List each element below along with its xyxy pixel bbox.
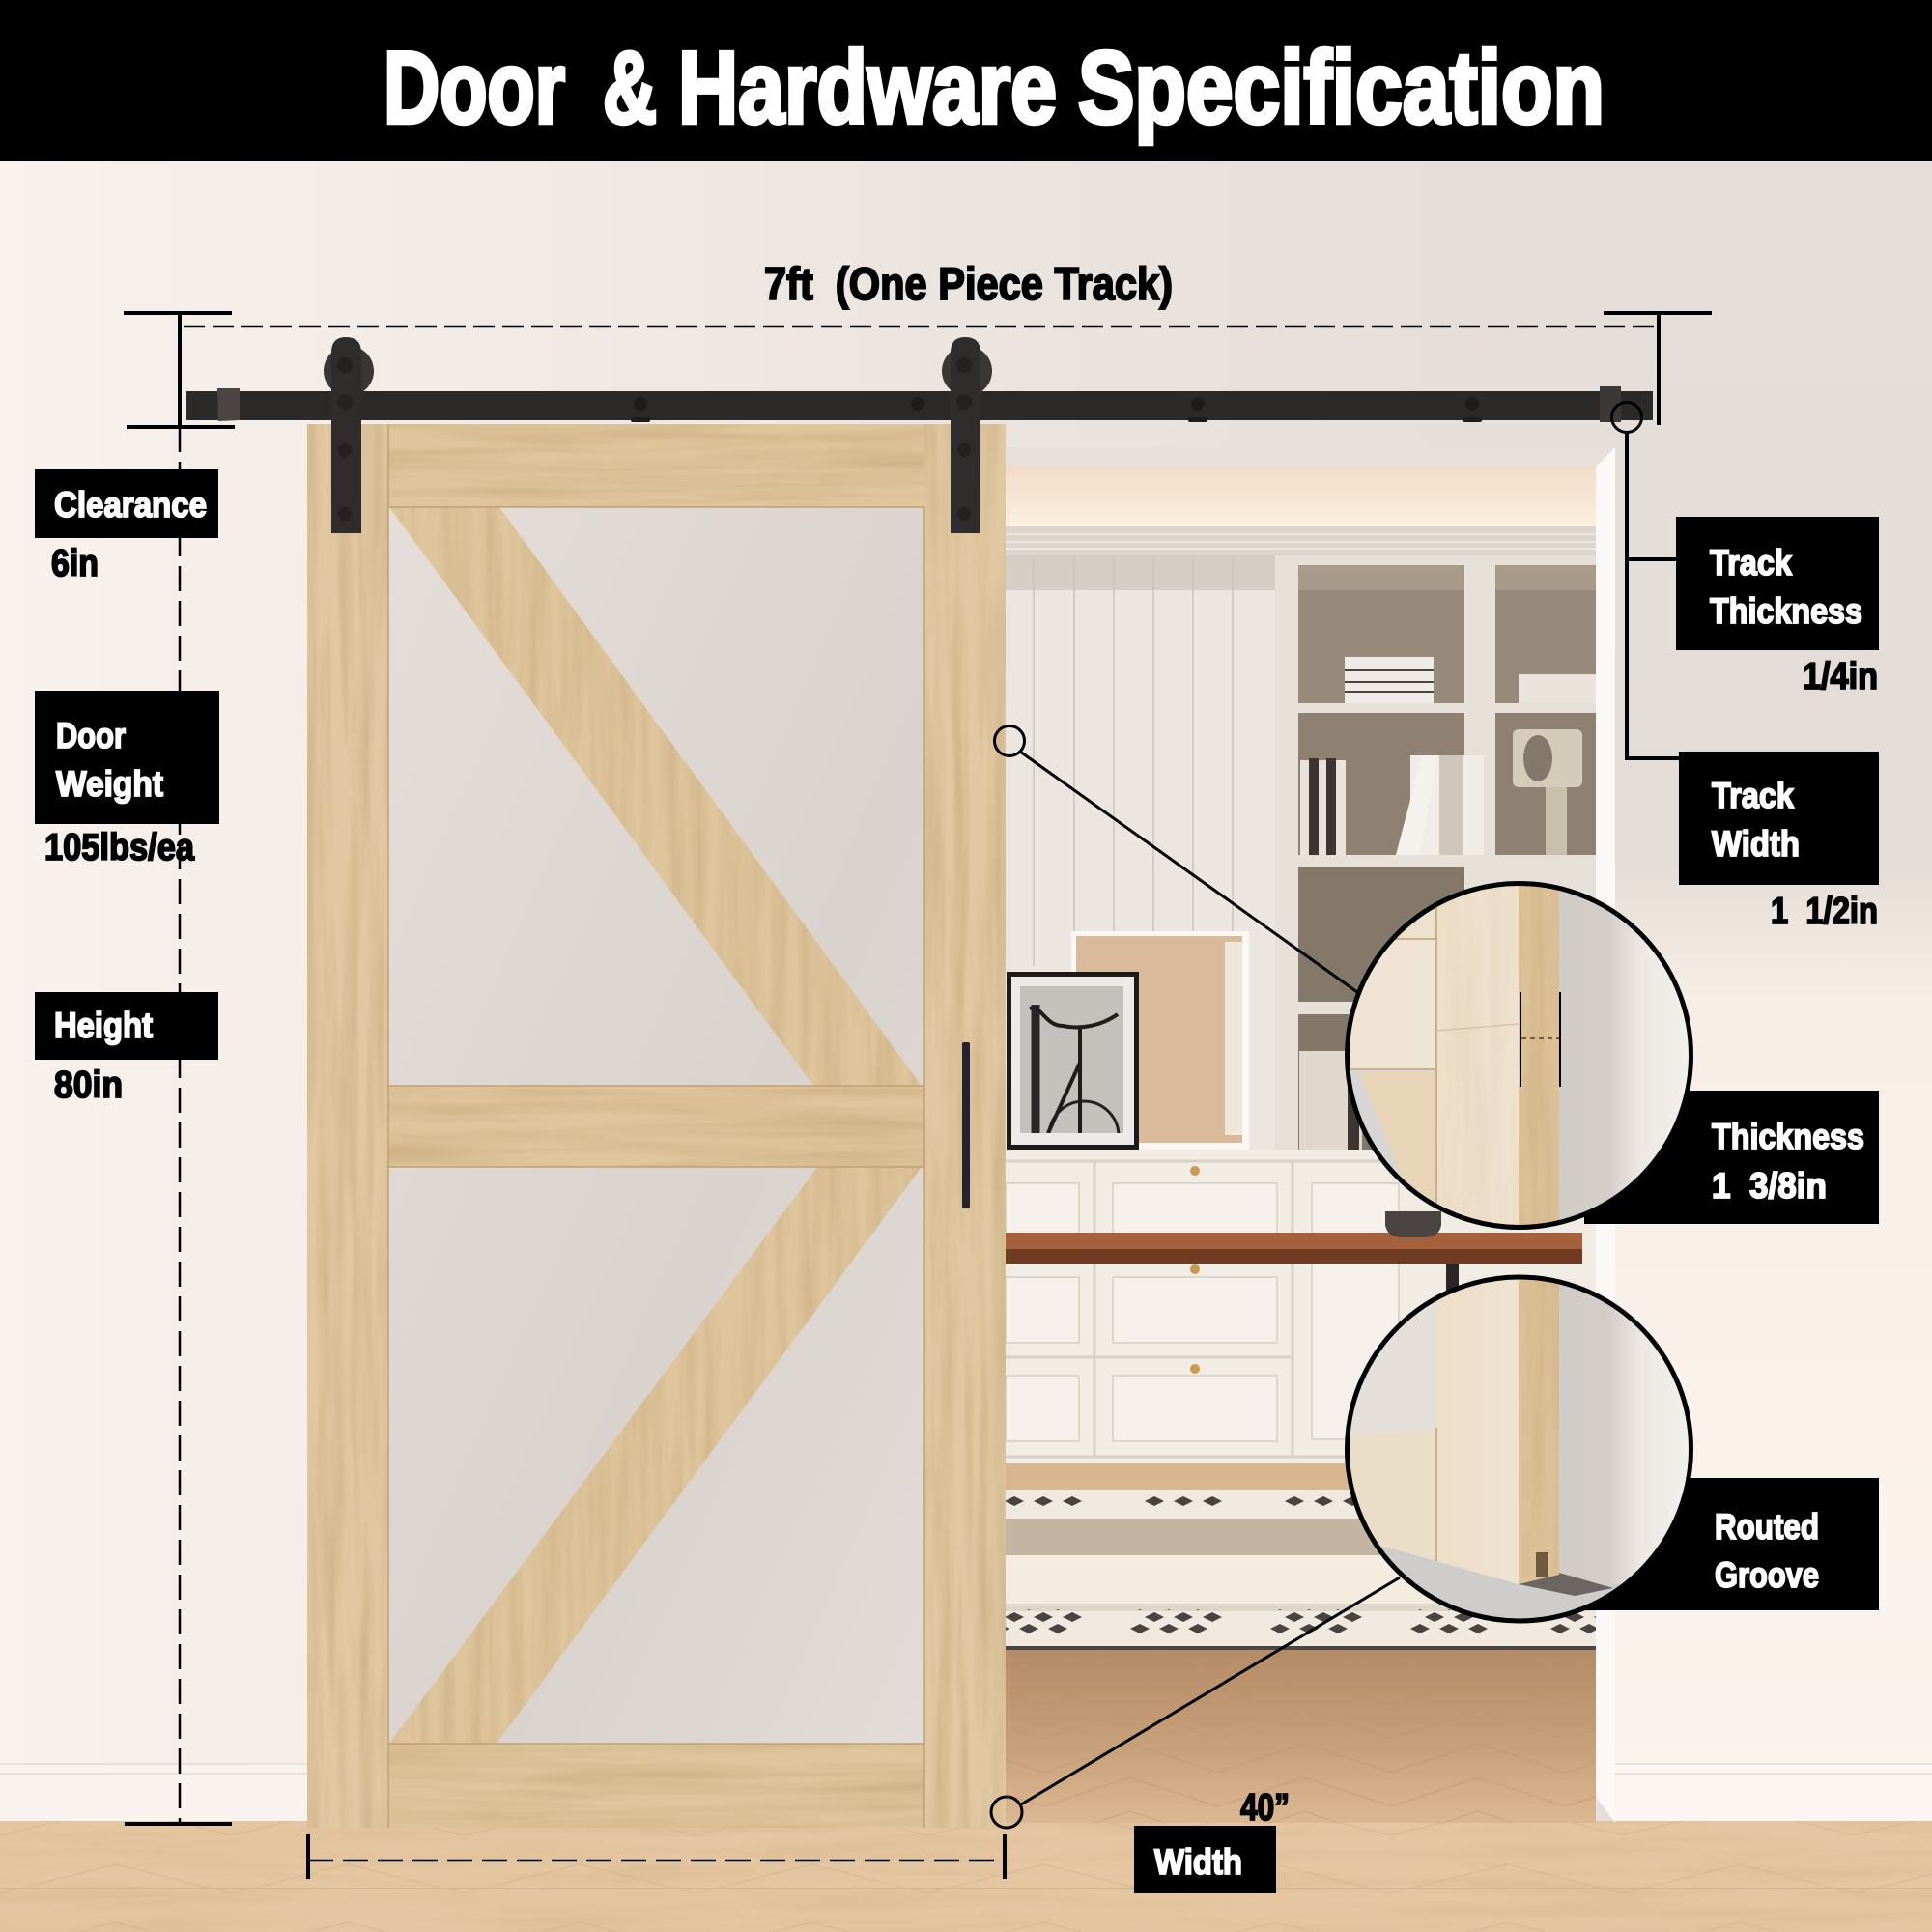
label: track width: 1 1/2in <box>1771 891 1878 932</box>
title: & <box>603 31 657 145</box>
diagonal brace upper <box>390 508 922 1086</box>
label: width <box>1134 1787 1290 1893</box>
door jamb <box>1596 447 1615 1823</box>
label: track thickness <box>1676 517 1879 697</box>
right stile <box>924 424 1006 1828</box>
diagonal brace lower <box>390 1167 922 1743</box>
callout leader: track <box>1611 402 1679 758</box>
label: routed groove: Groove <box>1715 1555 1819 1595</box>
label: door thickness: Thickness <box>1712 1117 1864 1156</box>
label: door thickness <box>1584 1091 1879 1224</box>
label: door weight <box>35 691 219 868</box>
right hanger <box>942 337 992 533</box>
track bolts <box>631 397 1482 422</box>
soffit and light cove <box>1006 447 1615 555</box>
track rail <box>186 391 1653 420</box>
top rail <box>388 424 924 507</box>
label: height: 80in <box>54 1065 123 1106</box>
label: track thickness: Track <box>1710 543 1792 582</box>
label: track thickness: 1/4in <box>1803 656 1878 697</box>
framed bicycle photo <box>1007 972 1139 1150</box>
left stopper <box>217 388 240 421</box>
track length label: 7ft (One Piece Track) <box>764 258 1173 309</box>
framed art <box>1071 931 1249 1150</box>
label: door thickness: 1 3/8in <box>1712 1166 1827 1206</box>
title: Door <box>384 31 565 145</box>
thickness marks <box>1520 992 1560 1087</box>
label: clearance <box>35 469 218 584</box>
label: clearance: 6in <box>51 543 99 584</box>
label: track width <box>1679 752 1879 932</box>
label: height: Height <box>54 1006 153 1045</box>
label: height <box>35 992 218 1106</box>
label: track width: Width <box>1712 824 1800 864</box>
label: door weight: Weight <box>56 764 163 804</box>
middle rail <box>388 1086 924 1167</box>
bookshelf <box>1275 555 1596 1174</box>
label: door weight: Door <box>56 716 126 755</box>
label: routed groove: Routed <box>1715 1507 1819 1547</box>
left stile <box>307 424 388 1828</box>
rug <box>1006 1490 1596 1650</box>
room floor <box>1006 1463 1596 1823</box>
title: Hardware <box>678 31 1057 145</box>
magnifier: routed groove detail <box>1346 1275 1700 1633</box>
height and clearance dimension lines <box>124 313 235 1824</box>
door width dimension <box>308 1834 1005 1879</box>
track length dimension <box>184 258 1712 425</box>
door handle <box>962 1042 970 1208</box>
left hanger <box>324 337 374 533</box>
label: width: Width <box>1154 1842 1242 1882</box>
label: width: 40” <box>1240 1787 1290 1829</box>
glass panel <box>388 507 925 1744</box>
room through the doorway <box>1006 447 1615 1823</box>
label: door weight: 105lbs/ea <box>44 827 194 868</box>
title: Specification <box>1078 31 1605 145</box>
table <box>1006 1211 1582 1293</box>
cabinets <box>1006 1150 1596 1463</box>
label: track thickness: Thickness <box>1710 591 1862 631</box>
right stopper <box>1600 386 1621 422</box>
bottom rail <box>388 1744 924 1828</box>
panelled wall <box>1006 555 1286 1174</box>
sliding track and hangers <box>186 337 1653 533</box>
label: clearance: Clearance <box>54 485 207 525</box>
label: track width: Track <box>1712 776 1794 815</box>
callout leaders: door details <box>991 726 1400 1828</box>
floor <box>0 1821 1932 1932</box>
label: routed groove <box>1584 1478 1879 1610</box>
header banner <box>0 0 1932 161</box>
books on shelf <box>1299 657 1596 1151</box>
magnifier: door thickness detail <box>1346 882 1693 1230</box>
barn door <box>290 424 1063 1828</box>
